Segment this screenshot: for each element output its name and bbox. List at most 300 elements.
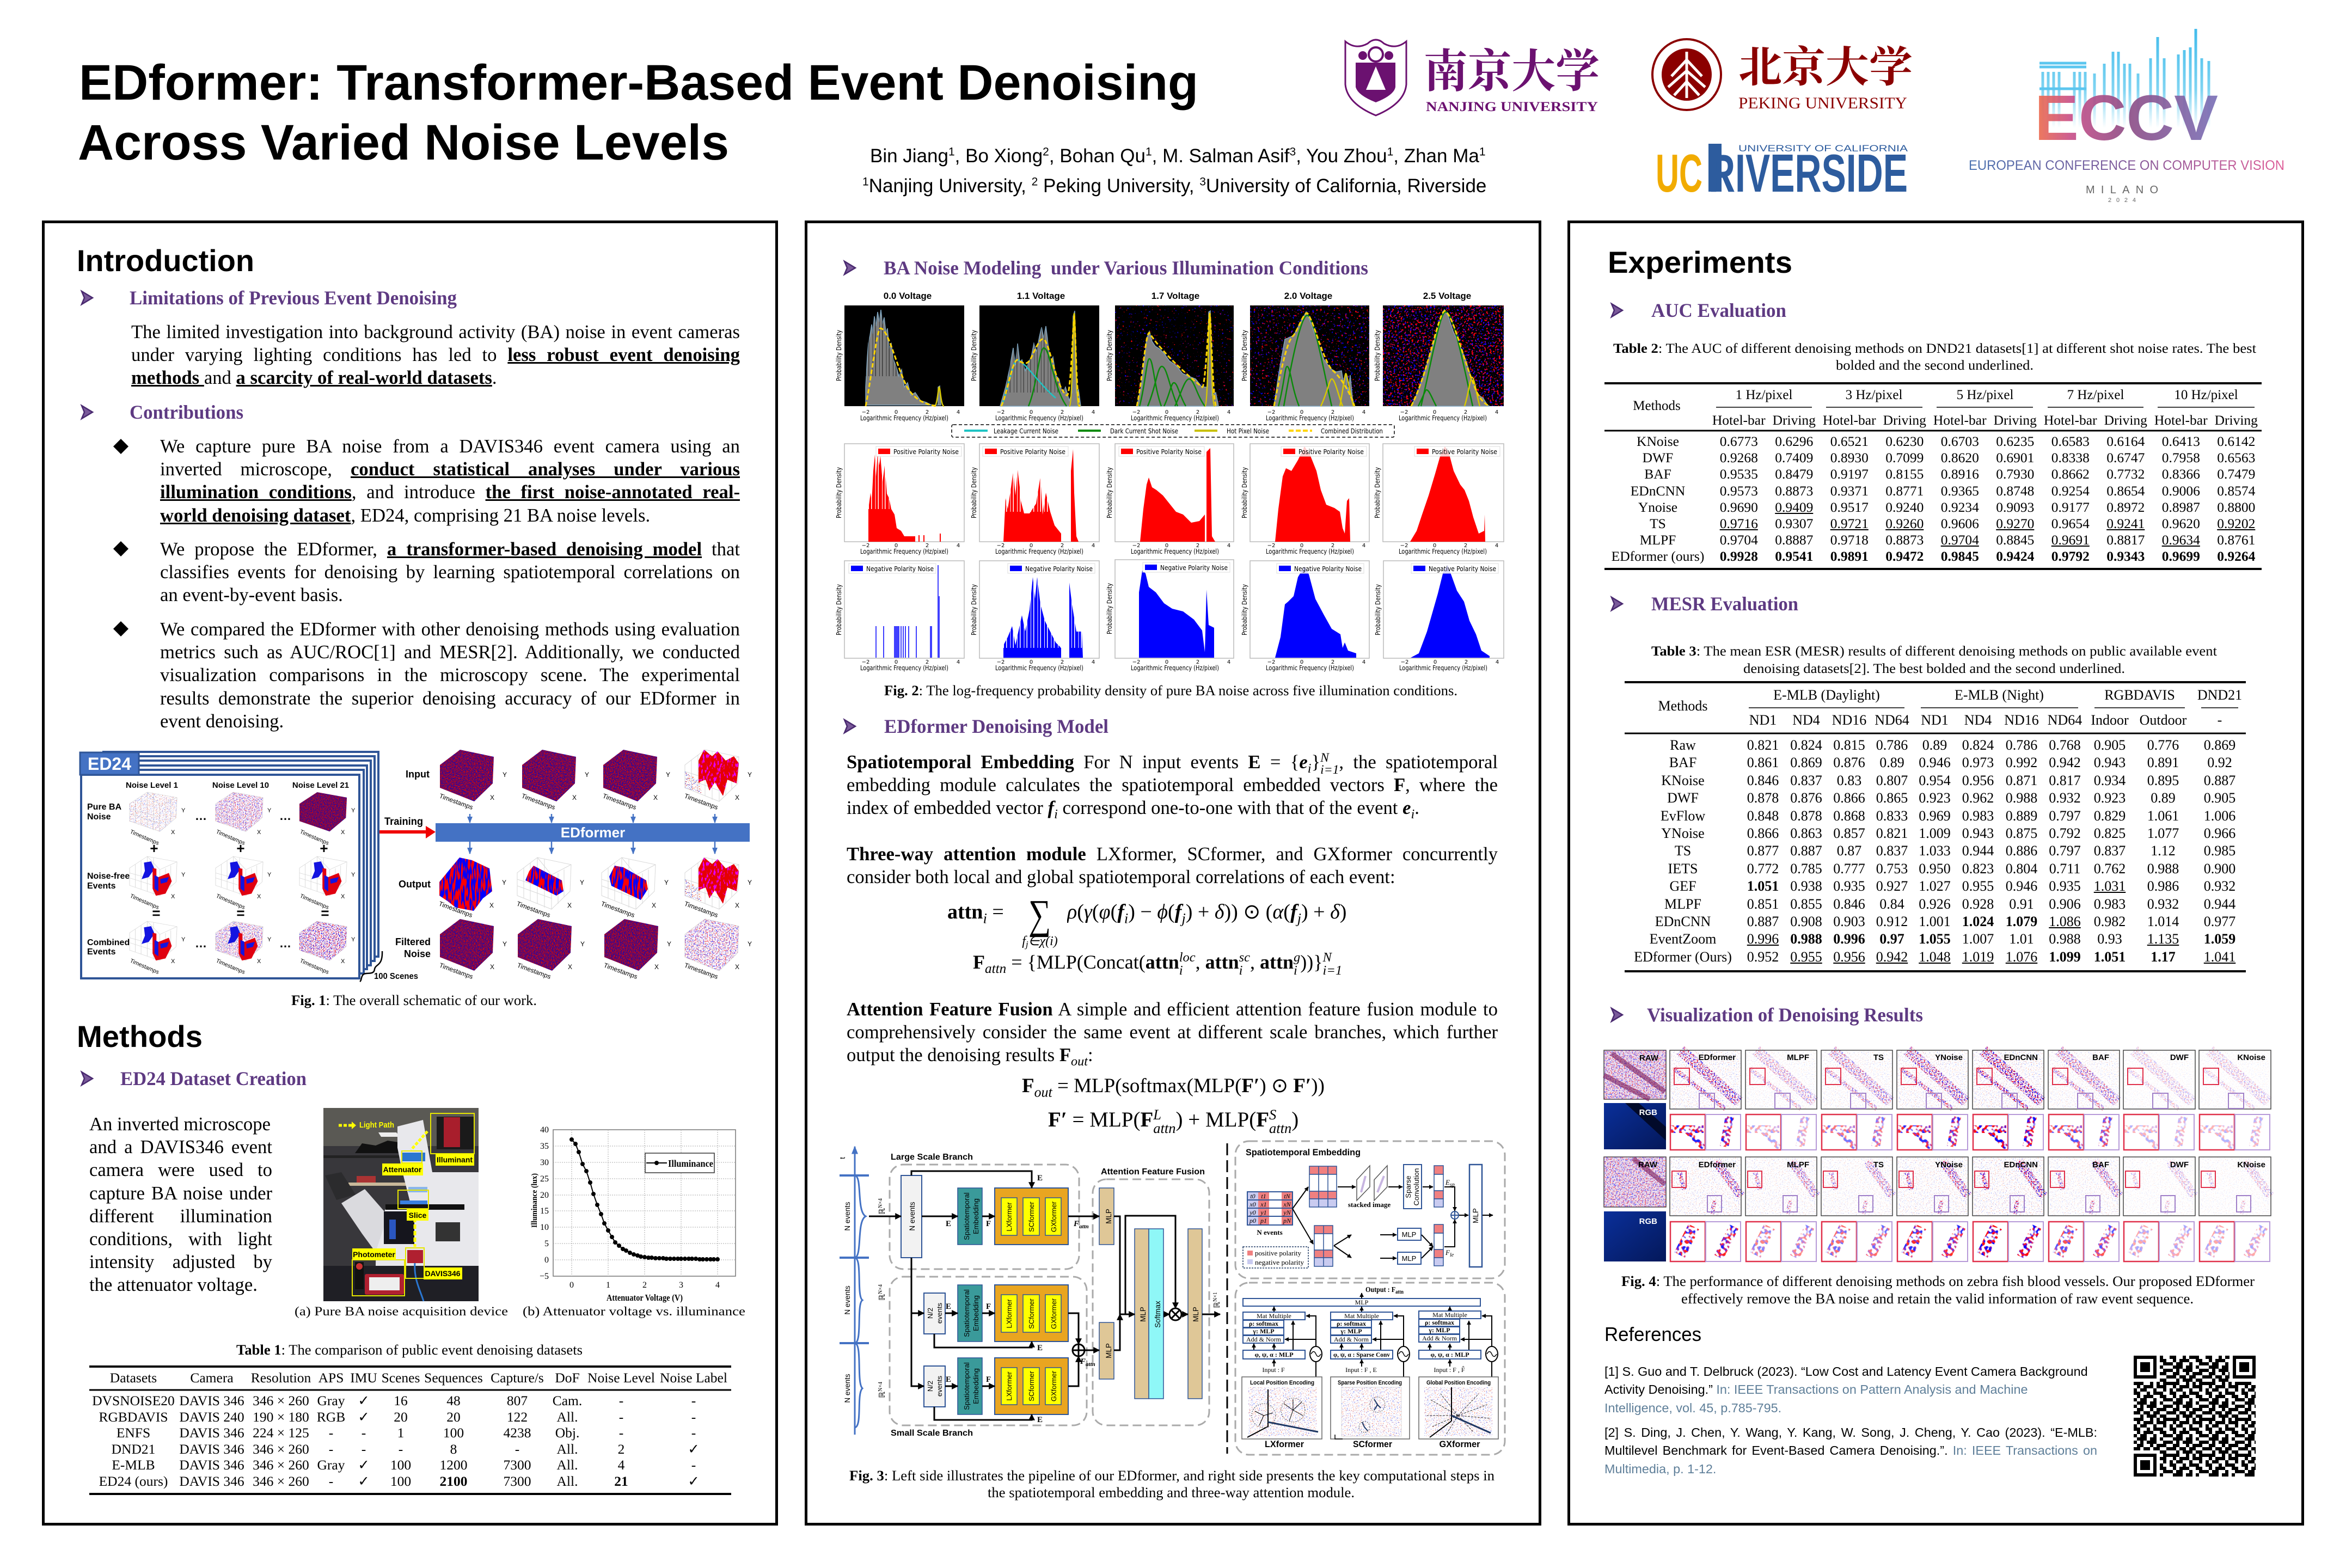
- table 1: dataset comparison: Resolution: [251, 1370, 311, 1386]
- line chart: attenuator voltage vs illuminance: 0: [544, 1255, 549, 1265]
- table 3: MESR values: 0.837: [1790, 773, 1822, 788]
- table 2: AUC values: 0.9371: [1830, 483, 1869, 499]
- chart: negative polarity 2.0 voltage: 2: [1331, 659, 1334, 665]
- three-way attention detail: MLP: [1355, 1298, 1369, 1306]
- plus, equals and ellipsis symbols: …: [279, 936, 291, 950]
- filtered noise cube row: Timestamps: [683, 961, 719, 981]
- table 3: MESR values: YNoise: [1661, 825, 1705, 841]
- table 2 caption: Table 2: The AUC of different denoising methods on DND21 datasets[1] at different shot noise rates. The best: [1613, 341, 2256, 356]
- table 2: AUC values: 0.9260: [1885, 516, 1924, 531]
- chart: positive polarity 2.0 voltage: Probability Density: [1241, 467, 1248, 518]
- heading: Introduction: Introduction: [77, 243, 254, 278]
- table 2: AUC values: 0.9654: [2051, 516, 2090, 531]
- chart: 1.7 voltage mixture: 1.7 Voltage: [1152, 291, 1199, 301]
- equation: F prime: attn: [1269, 1120, 1291, 1136]
- line chart: attenuator voltage vs illuminance: [530, 1125, 736, 1303]
- large scale branch: SCformer: [1027, 1202, 1036, 1232]
- table 3: MESR values: 0.944: [2204, 896, 2235, 912]
- heading: References: References: [1604, 1323, 1701, 1345]
- SCformer column: φ, ψ, α : Sparse Conv: [1333, 1351, 1390, 1358]
- table 2: AUC values: 0.9202: [2217, 516, 2255, 531]
- plus, equals and ellipsis symbols: +: [236, 840, 245, 856]
- pipeline symbol labels: F: [986, 1302, 991, 1311]
- table 3: MESR values: 0.871: [2006, 773, 2037, 788]
- branch and fusion dashed frames: [890, 1141, 1505, 1455]
- table 2: AUC values: 0.6563: [2217, 450, 2255, 465]
- table 2: AUC values: 0.8748: [1996, 483, 2034, 499]
- LXformer column: Add & Norm: [1246, 1336, 1282, 1343]
- stacked image: stacked image: [1348, 1200, 1391, 1209]
- chart: positive polarity 1.7 voltage: 4: [1227, 543, 1230, 549]
- table 2: AUC values: 0.9307: [1775, 516, 1813, 531]
- table 1: dataset comparison: ED24 (ours): [99, 1473, 168, 1489]
- table 3: MESR values: 0.988: [1790, 931, 1822, 947]
- small scale branch upper: SCformer: [1027, 1298, 1036, 1329]
- chart: positive polarity 2.0 voltage: 2: [1331, 543, 1334, 549]
- title: EDformer: Transformer-Based Event Denoising: [79, 55, 1198, 111]
- table 2: AUC values: 0.9517: [1830, 499, 1869, 515]
- pure BA noise cubes: Timestamps: [299, 829, 330, 847]
- table 3: MESR values: 0.825: [2094, 825, 2126, 841]
- logo: Peking University: [1652, 33, 1913, 112]
- time axis with braces: N×4: [878, 1198, 884, 1208]
- chart: negative polarity 2.0 voltage: 4: [1362, 659, 1365, 665]
- combined event cubes: Timestamps: [299, 958, 330, 976]
- equation: F attn: i: [1294, 963, 1297, 978]
- table 2: AUC values: 0.6296: [1775, 433, 1813, 449]
- table 3: MESR values: 0.863: [1790, 825, 1822, 841]
- chart: negative polarity 1.7 voltage: Probability Density: [1106, 583, 1113, 634]
- table 3: MESR values: 0.823: [1962, 861, 1994, 877]
- output cube row: X: [652, 902, 656, 909]
- table 2 group headers: [1633, 388, 2238, 413]
- table 2: AUC values: 0.7479: [2217, 466, 2255, 482]
- chart: 1.1 voltage mixture: 2: [1061, 409, 1064, 415]
- table 3: MESR values: ND64: [1875, 712, 1909, 728]
- filtered noise cube row: Timestamps: [516, 961, 552, 981]
- line chart: attenuator voltage vs illuminance: 25: [540, 1174, 549, 1184]
- line chart: attenuator voltage vs illuminance: 1: [606, 1281, 610, 1290]
- table 2 rules: [1604, 383, 2262, 569]
- pipeline symbol labels: E: [946, 1302, 951, 1311]
- table 3: MESR values: 0.927: [1876, 878, 1908, 894]
- table 3: MESR values: 0.912: [1876, 914, 1908, 929]
- subheading: limitations: Limitations of Previous Event Denoising: [130, 287, 457, 309]
- table 1: dataset comparison: 48: [446, 1393, 461, 1408]
- chart: 0.0 voltage mixture: 0.0 Voltage: [884, 291, 932, 301]
- divider between pipeline and key steps: [1226, 1143, 1228, 1454]
- icon: arrow bullet: [844, 261, 855, 274]
- figure 2 caption: Fig. 2: The log-frequency probability density of pure BA noise across five illumination conditions.: [884, 683, 1457, 699]
- table 2: AUC values: 0.9573: [1720, 483, 1758, 499]
- table 3: MESR values: 0.804: [2006, 861, 2037, 877]
- text block: contribution 3: event denoising.: [160, 711, 284, 732]
- chart legend: Hot Pixel Noise: [1227, 427, 1269, 435]
- event table: N events: [1257, 1228, 1283, 1236]
- text block: contribution 2: [160, 538, 740, 609]
- photo: acquisition device: Attenuator: [383, 1165, 422, 1174]
- table 1: dataset comparison: ENFS: [117, 1425, 150, 1441]
- GXformer column: ρ: softmax: [1425, 1319, 1454, 1326]
- table 3: MESR values: 0.875: [2006, 825, 2037, 841]
- table 2: AUC values: 0.9409: [1775, 499, 1813, 515]
- table 2: AUC values: 0.9234: [1941, 499, 1979, 515]
- table 3: MESR values: 0.983: [1962, 808, 1994, 824]
- table 3: MESR values: 0.876: [1790, 790, 1822, 806]
- text block: dataset description: and a DAVIS346 event: [89, 1137, 272, 1157]
- input cube row: X: [735, 794, 739, 801]
- table 3: MESR values: 0.934: [2094, 773, 2126, 788]
- table 3 rules: [1625, 682, 2246, 971]
- chart: negative polarity 0.0 voltage: −2: [862, 659, 869, 665]
- table 1: dataset comparison: -: [619, 1393, 623, 1408]
- chart: positive polarity 2.5 voltage: [1374, 444, 1504, 555]
- equation: F prime: L: [1153, 1106, 1161, 1123]
- chart: negative polarity 0.0 voltage: 0: [895, 659, 898, 665]
- chart: negative polarity 0.0 voltage: Logarithmic Frequency (Hz/pixel): [860, 664, 948, 672]
- text block: contribution 3: results demonstrate the superior denoising accuracy of our EDformer in: [160, 688, 740, 709]
- pipeline arrows: [869, 1171, 1220, 1420]
- table 2: AUC values: 0.6230: [1885, 433, 1924, 449]
- logo: Peking University: PEKING UNIVERSITY: [1738, 94, 1907, 112]
- EDformer bar with arrows: [436, 814, 750, 854]
- figure 3: architecture diagram: [838, 1141, 1505, 1455]
- event table: p1: [1260, 1217, 1267, 1224]
- icon: arrow bullet: [844, 720, 855, 733]
- chart: positive polarity 1.7 voltage: Logarithmic Frequency (Hz/pixel): [1131, 548, 1219, 555]
- event table: t0: [1250, 1192, 1255, 1200]
- small scale branch lower: events: [935, 1375, 944, 1396]
- small scale branch upper: LXformer: [1005, 1299, 1013, 1328]
- table 2: AUC values: 0.8155: [1885, 466, 1924, 482]
- table 3: MESR values: 0.91: [2009, 896, 2034, 912]
- logo: ECCV Milano 2024: [1969, 29, 2284, 204]
- table 3: MESR values: ND4: [1964, 712, 1992, 728]
- line chart: attenuator voltage vs illuminance: 5: [544, 1239, 549, 1248]
- sparse convolution box: Sparse: [1404, 1175, 1412, 1198]
- pure BA noise cubes: X: [257, 829, 261, 836]
- equation: F attn: g: [1294, 950, 1300, 965]
- logo: UC Riverside: [1656, 143, 1908, 203]
- table 2: AUC values: 0.9634: [2162, 532, 2200, 548]
- small scale branch lower: [924, 1358, 1068, 1414]
- chart: negative polarity 1.1 voltage: Logarithmic Frequency (Hz/pixel): [995, 664, 1083, 672]
- fusion blocks: MLP: [1192, 1307, 1200, 1322]
- heading: Experiments: Experiments: [1608, 245, 1792, 279]
- chart: positive polarity 2.0 voltage: 0: [1300, 543, 1303, 549]
- table 2: AUC values: 0.8817: [2106, 532, 2145, 548]
- table 3: MESR values: 0.985: [2204, 843, 2235, 859]
- table 3: MESR values: 0.943: [1962, 825, 1994, 841]
- fusion blocks: [1073, 1188, 1222, 1399]
- chart: positive polarity 2.5 voltage: 4: [1495, 543, 1498, 549]
- chart: negative polarity 1.7 voltage: 2: [1196, 659, 1199, 665]
- combined event cubes: Timestamps: [215, 958, 246, 976]
- filtered noise cube row: Y: [748, 940, 752, 948]
- table 1: dataset comparison: 8: [450, 1441, 457, 1457]
- table 3: MESR values: 1.001: [1919, 914, 1951, 929]
- text block: spatiotemporal embedding: index of embedded vector fi correspond one-to-one with that of the event ei.: [847, 798, 1419, 822]
- table 3: MESR values: 0.869: [2204, 737, 2235, 753]
- feature columns and MLPs: F: [1445, 1248, 1450, 1257]
- subheading: BA noise modeling: BA Noise Modeling under Various Illumination Conditions: [884, 257, 1368, 279]
- chart: 1.1 voltage mixture: −2: [997, 409, 1004, 415]
- table 2: AUC values: 0.8987: [2162, 499, 2200, 515]
- ED24 dataset stack: ED24: [88, 754, 131, 774]
- chart: positive polarity 1.1 voltage: [970, 444, 1099, 555]
- filtered noise cube row: Y: [667, 940, 671, 948]
- equation: F attn: N: [1323, 950, 1332, 965]
- table 3: MESR values: 1.099: [2049, 949, 2081, 965]
- event table: pN: [1283, 1217, 1291, 1224]
- chart: positive polarity 0.0 voltage: 0: [895, 543, 898, 549]
- table 2 group headers: 3 Hz/pixel: [1846, 388, 1902, 402]
- sparse convolution box: Convolution: [1412, 1168, 1420, 1205]
- pure BA noise cubes: [129, 792, 356, 847]
- table 3: MESR values: 1.076: [2006, 949, 2037, 965]
- combined event cubes: X: [341, 958, 345, 965]
- chart: negative polarity 1.1 voltage: 2: [1061, 659, 1064, 665]
- table 1: dataset comparison: APS: [318, 1370, 344, 1386]
- plus, equals and ellipsis symbols: …: [195, 809, 207, 823]
- chart: 1.7 voltage mixture: Probability Density: [1106, 330, 1113, 381]
- table 3: MESR values: 0.869: [1790, 755, 1822, 770]
- table 2: AUC values: 0.9241: [2106, 516, 2145, 531]
- table 2: AUC values: 0.6235: [1996, 433, 2034, 449]
- chart: 0.0 voltage mixture: [835, 291, 964, 422]
- GXformer column: γ: MLP: [1428, 1326, 1450, 1334]
- table 1: dataset comparison: DAVIS 346: [179, 1441, 244, 1457]
- noise-free event cubes: Y: [351, 872, 356, 878]
- table 3: MESR values: 0.946: [2006, 878, 2037, 894]
- equation: F prime: [1048, 1104, 1304, 1137]
- table 2: AUC values: 0.8662: [2051, 466, 2090, 482]
- chart: 0.0 voltage mixture: −2: [862, 409, 869, 415]
- column labels: Noise Level 10: [212, 781, 269, 790]
- table 2: AUC values: EDnCNN: [1631, 483, 1685, 499]
- table 3: MESR values: 0.900: [2204, 861, 2235, 877]
- chart: 1.1 voltage mixture: Logarithmic Frequency (Hz/pixel): [995, 414, 1083, 422]
- table 1: dataset comparison: RGB: [317, 1409, 345, 1425]
- LXformer column: φ, ψ, α : MLP: [1254, 1351, 1294, 1358]
- time axis with braces: N events: [843, 1285, 852, 1315]
- table 2: AUC values: 0.9254: [2051, 483, 2090, 499]
- table 2: AUC values: Ynoise: [1638, 499, 1677, 515]
- chart: positive polarity 2.5 voltage: 0: [1433, 543, 1436, 549]
- table 3: MESR values: 0.797: [2049, 843, 2081, 859]
- table 3: MESR values: 0.792: [2049, 825, 2081, 841]
- table 2: AUC values: 0.9606: [1941, 516, 1979, 531]
- pure BA noise cubes: Y: [181, 807, 186, 814]
- chart: 2.5 voltage mixture: [1374, 291, 1504, 422]
- table 3: MESR values: 0.895: [2147, 773, 2179, 788]
- table 3: MESR values: 0.969: [1919, 808, 1951, 824]
- noise-free event cubes: X: [257, 893, 261, 900]
- table 1: dataset comparison: ✓: [358, 1409, 370, 1425]
- table 3: MESR values: 1.027: [1919, 878, 1951, 894]
- table 2: AUC values: 0.8574: [2217, 483, 2255, 499]
- chart: positive polarity 1.1 voltage: −2: [997, 543, 1004, 549]
- table 3 group headers: E-MLB (Daylight): [1773, 687, 1880, 703]
- table 1: dataset comparison: -: [691, 1393, 696, 1408]
- upper comparison row: EDnCNN: [2004, 1053, 2038, 1062]
- table 3: MESR values: 0.988: [2006, 790, 2037, 806]
- table 2: AUC values: 0.8654: [2106, 483, 2145, 499]
- pipeline symbol labels: attn: [1079, 1223, 1089, 1230]
- event table: x1: [1260, 1200, 1267, 1208]
- table 3: MESR values: 0.846: [1833, 896, 1865, 912]
- table 3: MESR values: GEF: [1669, 878, 1696, 894]
- subheading: visualization: Visualization of Denoising Results: [1647, 1004, 1923, 1026]
- chart: negative polarity 1.1 voltage: −2: [997, 659, 1004, 665]
- table 1: dataset comparison: 7300: [503, 1457, 531, 1473]
- table 3: MESR values: BAF: [1669, 755, 1696, 770]
- table 3: MESR values: 0.851: [1747, 896, 1779, 912]
- references list: [1] S. Guo and T. Delbruck (2023). “Low Cost and Latency Event Camera Background: [1604, 1364, 2088, 1379]
- text block: attention feature fusion: [847, 998, 1498, 1071]
- table 3 group headers: RGBDAVIS: [2104, 687, 2175, 703]
- table 1: dataset comparison: Cam.: [553, 1393, 582, 1408]
- table 1: dataset comparison: ✓: [688, 1441, 700, 1457]
- table 2: AUC values: 0.9270: [1996, 516, 2034, 531]
- small scale branch upper: N/2: [926, 1308, 934, 1319]
- table 3: MESR values: 0.942: [2049, 755, 2081, 770]
- chart: 0.0 voltage mixture: Probability Density: [835, 330, 843, 381]
- table 1: dataset comparison: All.: [557, 1441, 578, 1457]
- table 1: dataset comparison: DoF: [555, 1370, 580, 1386]
- table 2: AUC values: Hotel-bar: [1933, 412, 1987, 428]
- table 3: MESR values: 1.024: [1962, 914, 1994, 929]
- training arrow: [379, 816, 436, 838]
- noise-free event cubes: Timestamps: [299, 893, 330, 911]
- feature columns and MLPs: le: [1450, 1252, 1454, 1258]
- table 2: AUC values: 0.7930: [1996, 466, 2034, 482]
- table 2: AUC values: 0.9268: [1720, 450, 1758, 465]
- plus, equals and ellipsis symbols: =: [236, 905, 245, 921]
- table 3: MESR values: 0.776: [2147, 737, 2179, 753]
- table 1: dataset comparison: DAVIS 346: [179, 1457, 244, 1473]
- icon: arrow bullet: [82, 1072, 93, 1085]
- chart: negative polarity 0.0 voltage: Negative Polarity Noise: [866, 565, 934, 573]
- filtered noise cube row: Filtered: [395, 936, 431, 947]
- chart: negative polarity 0.0 voltage: 4: [957, 659, 960, 665]
- chart: negative polarity 1.7 voltage: Logarithmic Frequency (Hz/pixel): [1131, 664, 1219, 672]
- chart: negative polarity 2.5 voltage: Probability Density: [1374, 584, 1382, 635]
- training arrow: Training: [384, 816, 423, 828]
- text block: contribution 3: visualization comparisons in the microscopy scene. The experimental: [160, 665, 740, 685]
- table 2: AUC values: 0.9424: [1996, 548, 2034, 564]
- raw and RGB thumbnails: [1604, 1050, 1666, 1261]
- noise-free event cubes: Timestamps: [129, 893, 160, 911]
- table 3: MESR values: 0.797: [2049, 808, 2081, 824]
- table 1: dataset comparison: 20: [446, 1409, 461, 1425]
- feature columns and MLPs: MLP: [1472, 1208, 1480, 1223]
- polarity legend: [1243, 1247, 1308, 1268]
- table 1: dataset comparison: 346 × 260: [253, 1441, 309, 1457]
- text block: spatiotemporal embedding: i=1: [1320, 763, 1339, 777]
- subheading: MESR evaluation: MESR Evaluation: [1651, 593, 1798, 615]
- references list: Multimedia, p. 1-12.: [1604, 1462, 1716, 1476]
- header: [78, 29, 2284, 204]
- chart: positive polarity 2.5 voltage: 2: [1464, 543, 1467, 549]
- icon: bullet diamonds: [113, 439, 128, 636]
- chart: negative polarity 2.0 voltage: Negative Polarity Noise: [1294, 565, 1362, 573]
- table 3: MESR values: 0.932: [2049, 790, 2081, 806]
- chart: negative polarity 1.7 voltage: −2: [1132, 659, 1140, 665]
- icon: arrow bullet: [82, 406, 93, 419]
- table 2: AUC values: 0.8873: [1775, 483, 1813, 499]
- filtered noise cube row: X: [568, 963, 572, 971]
- chart: 2.0 voltage mixture: 2.0 Voltage: [1284, 291, 1332, 301]
- small scale branch lower: N/2: [926, 1381, 934, 1392]
- table 2: AUC values: 0.7732: [2106, 466, 2145, 482]
- text block: dataset description: [89, 1113, 272, 1301]
- LXformer column: Local Position Encoding: [1250, 1380, 1314, 1386]
- table 3 group headers: Methods: [1658, 698, 1707, 714]
- row labels: Events: [87, 947, 116, 957]
- table 3: MESR values: 0.932: [2204, 878, 2235, 894]
- table 3 group headers: DND21: [2197, 687, 2242, 703]
- chart: 1.7 voltage mixture: [1106, 291, 1234, 422]
- lower comparison row: MLPF: [1787, 1160, 1809, 1169]
- output cube row: Timestamps: [600, 900, 636, 919]
- pure BA noise cubes: Timestamps: [215, 829, 246, 847]
- upper comparison row: TS: [1873, 1053, 1884, 1062]
- chart: positive polarity 2.0 voltage: 4: [1362, 543, 1365, 549]
- pipeline symbol labels: E: [946, 1220, 951, 1228]
- combined event cubes: Y: [351, 936, 356, 943]
- embedding arrows: [1293, 1187, 1493, 1258]
- table 1: dataset comparison: Camera: [190, 1370, 234, 1386]
- table 3: MESR values: ND4: [1792, 712, 1820, 728]
- filtered noise cube row: Timestamps: [603, 961, 639, 981]
- chart: positive polarity 0.0 voltage: [835, 444, 964, 555]
- feature columns and MLPs: MLP: [1402, 1254, 1416, 1263]
- SCformer column: [1331, 1307, 1410, 1449]
- pipeline symbol labels: F: [1074, 1220, 1079, 1228]
- equation: F prime: F′ = MLP(F ) + MLP(F ): [1048, 1108, 1298, 1131]
- input cube row: X: [572, 794, 577, 801]
- branch labels: [891, 1153, 1205, 1438]
- panel: noise modeling and denoising model: [805, 220, 1541, 1526]
- equation: attention sum: j: [1025, 939, 1028, 950]
- table 3: MESR values: 1.135: [2147, 931, 2179, 947]
- table 1: dataset comparison: 346 × 260: [253, 1473, 309, 1489]
- polarity legend: positive polarity: [1255, 1249, 1301, 1257]
- logo: Nanjing University: [1345, 35, 1600, 115]
- table 1: dataset comparison: Datasets: [110, 1370, 157, 1386]
- chart: negative polarity 0.0 voltage: [835, 561, 964, 672]
- branch labels: Small Scale Branch: [891, 1429, 973, 1438]
- plus, equals and ellipsis symbols: +: [150, 840, 158, 856]
- table 1: dataset comparison: 1200: [440, 1457, 467, 1473]
- table 3: MESR values: 0.762: [2094, 861, 2126, 877]
- output cube row: Output: [399, 879, 431, 890]
- table 1: dataset comparison: ✓: [358, 1393, 370, 1408]
- input cube row: Y: [503, 771, 507, 779]
- table 2: AUC values: 0.9541: [1775, 548, 1813, 564]
- chart: 1.1 voltage mixture: Probability Density: [970, 330, 978, 381]
- table 1: dataset comparison: Noise Level: [587, 1370, 655, 1386]
- chart legend: Combined Distribution: [1321, 427, 1383, 435]
- three-way attention detail: [1242, 1286, 1498, 1449]
- heading: Methods: Methods: [77, 1019, 203, 1054]
- output cube row: X: [489, 902, 494, 909]
- table 1: dataset comparison: -: [691, 1457, 696, 1473]
- table 1: dataset comparison: -: [329, 1473, 333, 1489]
- table 2: AUC values: 0.8845: [1996, 532, 2034, 548]
- icon: arrow bullet: [1612, 304, 1622, 317]
